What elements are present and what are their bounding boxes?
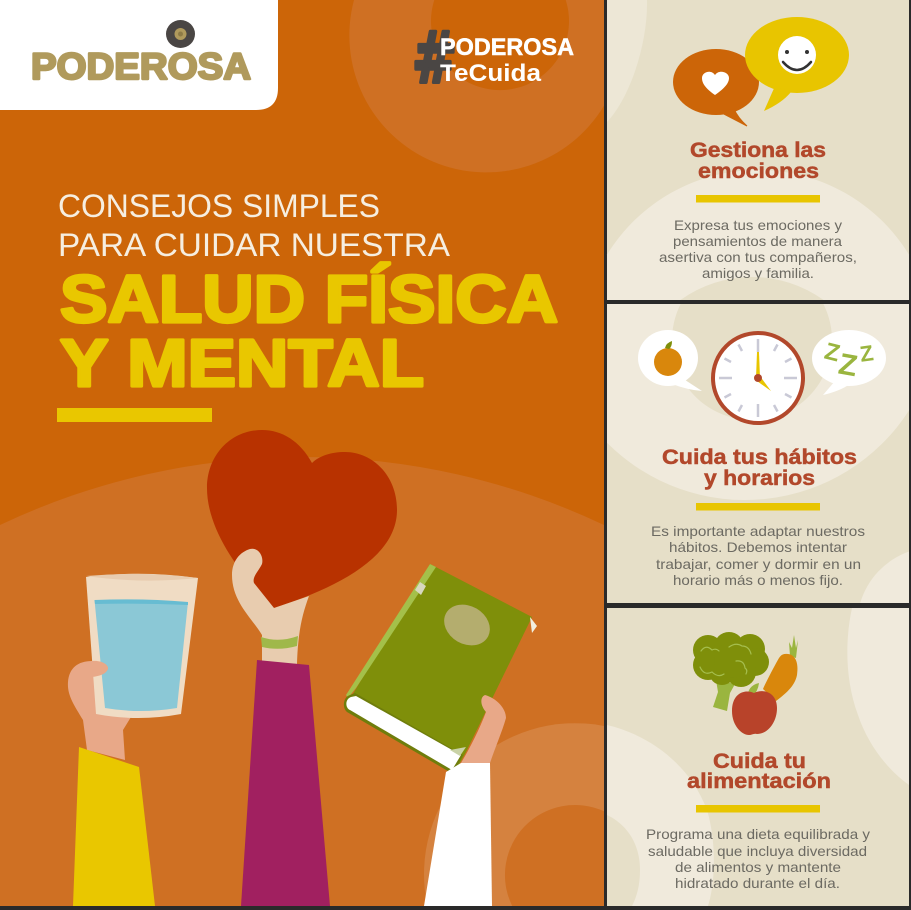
icon: sleep speech bubble: Z bbox=[836, 348, 860, 383]
icon: vegetables bbox=[693, 632, 798, 735]
panel: Cuida tus hábitos y horarios bbox=[607, 304, 909, 603]
text block: pensamientos de manera bbox=[673, 233, 842, 249]
heading: Cuida tu bbox=[713, 750, 806, 773]
text block bbox=[659, 217, 857, 281]
heading: alimentación bbox=[687, 770, 831, 793]
hashtag: #PoderosaTeCuida: # bbox=[412, 17, 457, 99]
heading: Cuida tus hábitos bbox=[662, 446, 857, 469]
hashtag: #PoderosaTeCuida bbox=[412, 17, 574, 99]
text block: Es importante adaptar nuestros bbox=[651, 523, 865, 539]
title: PARA CUIDAR NUESTRA bbox=[58, 227, 451, 263]
hashtag: #PoderosaTeCuida: PODEROSA bbox=[440, 34, 574, 61]
panel: Cuida tu alimentación bbox=[607, 608, 909, 906]
icon: fruit speech bubble bbox=[638, 330, 702, 391]
illustration: left arm with glass of water bbox=[68, 574, 198, 906]
text block bbox=[646, 826, 870, 891]
title underline bbox=[57, 408, 212, 422]
logo: Poderosa: PODEROSA bbox=[31, 46, 251, 87]
text block: de alimentos y mantente bbox=[675, 859, 841, 875]
heading: y horarios bbox=[704, 467, 815, 490]
icon: sleep speech bubble bbox=[812, 330, 886, 395]
panel: Gestiona las emociones bbox=[607, 0, 909, 300]
heading underline bbox=[696, 503, 820, 510]
illustration: heart bbox=[207, 430, 397, 608]
text block: Programa una dieta equilibrada y bbox=[646, 826, 870, 842]
text block: horario más o menos fijo. bbox=[673, 572, 843, 588]
heading bbox=[687, 750, 831, 793]
icon: speech bubbles bbox=[673, 17, 849, 126]
text block: saludable que incluya diversidad bbox=[648, 843, 867, 859]
text block: trabajar, comer y dormir en un bbox=[656, 556, 861, 572]
hashtag: #PoderosaTeCuida: TeCuida bbox=[440, 60, 542, 87]
heading: Gestiona las bbox=[690, 139, 826, 162]
text block: amigos y familia. bbox=[702, 265, 814, 281]
title: Y MENTAL bbox=[60, 326, 424, 401]
text block: hábitos. Debemos intentar bbox=[669, 539, 847, 555]
heading bbox=[662, 446, 857, 490]
title: CONSEJOS SIMPLES bbox=[58, 188, 380, 224]
heading bbox=[690, 139, 826, 183]
text block: asertiva con tus compañeros, bbox=[659, 249, 857, 265]
illustration: middle arm holding heart bbox=[232, 549, 330, 906]
icon: sleep speech bubble: Z bbox=[822, 338, 843, 367]
icon: sleep speech bubble: Z bbox=[858, 340, 875, 367]
illustration: right arm with book bbox=[344, 564, 537, 906]
heading underline bbox=[696, 195, 820, 202]
heading underline bbox=[696, 805, 820, 812]
title bbox=[58, 188, 558, 401]
text block: hidratado durante el día. bbox=[675, 875, 840, 891]
title: SALUD FÍSICA bbox=[60, 262, 558, 337]
text block bbox=[651, 523, 865, 588]
logo: Poderosa bbox=[0, 0, 278, 110]
panel: main poster bbox=[0, 0, 604, 906]
text block: Expresa tus emociones y bbox=[674, 217, 842, 233]
icon: clock bbox=[713, 333, 803, 423]
heading: emociones bbox=[698, 160, 819, 183]
